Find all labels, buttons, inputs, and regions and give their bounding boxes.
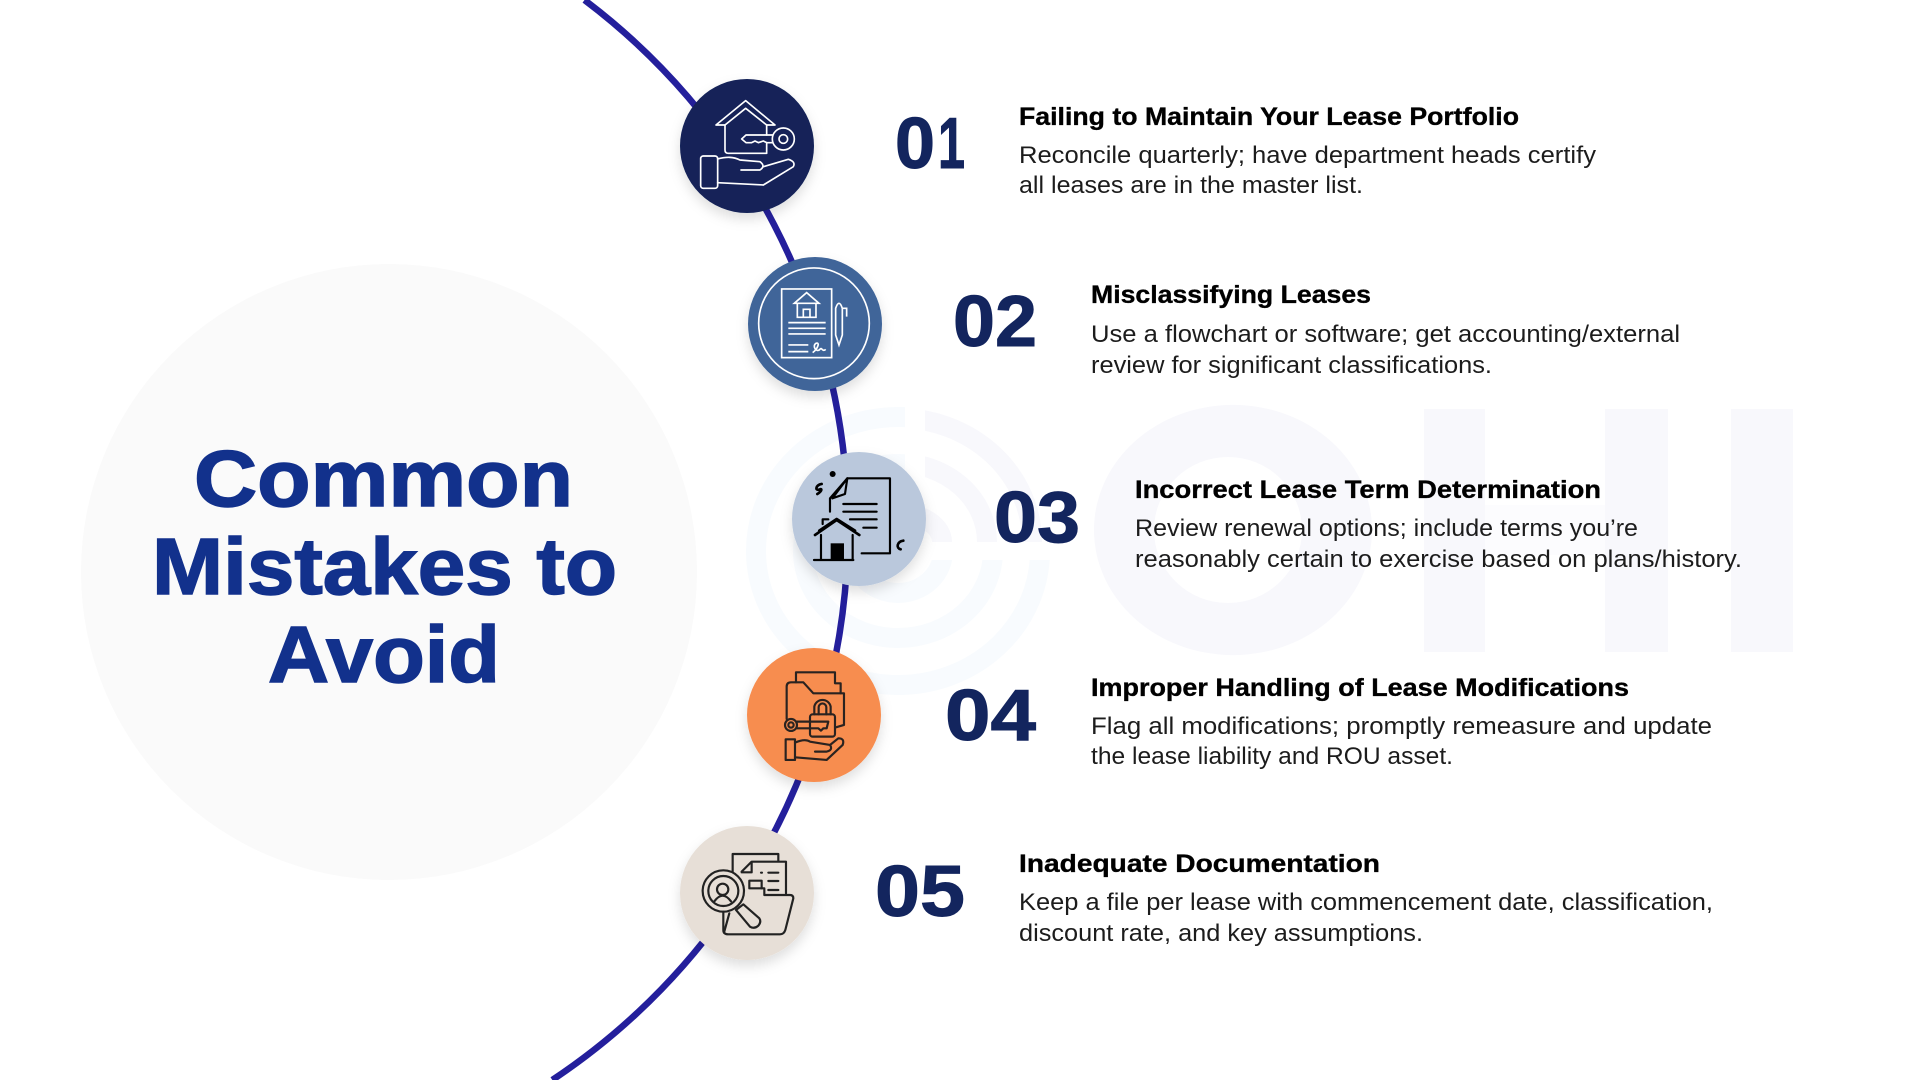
heading 04: Improper Handling of Lease Modifications <box>1091 674 1629 702</box>
number 03: 03 <box>994 478 1080 558</box>
text block 02: Use a flowchart or software; get accounting/external <box>1091 321 1680 348</box>
icon: folder lock key hand <box>747 648 881 782</box>
curved timeline arc <box>552 0 848 1080</box>
number 04: 04 <box>945 676 1036 756</box>
title: Mistakes to <box>152 522 617 611</box>
text block 04: Flag all modifications; promptly remeasure and update <box>1091 713 1712 740</box>
number 05: 05 <box>875 852 965 932</box>
panel: mistake 01 <box>680 79 1596 213</box>
text block 05: Keep a file per lease with commencement date, classification, <box>1019 889 1713 916</box>
panel: mistake 02 <box>748 257 1680 391</box>
title: Avoid <box>268 610 500 699</box>
icon: signed lease document <box>748 257 882 391</box>
title: Common <box>194 434 573 523</box>
text block 04: the lease liability and ROU asset. <box>1091 743 1453 770</box>
panel: mistake 05 <box>680 826 1713 960</box>
text block 03: Review renewal options; include terms you’re <box>1135 515 1638 542</box>
icon: house key in hand <box>680 79 814 213</box>
watermark logo <box>756 405 1793 685</box>
number 02: 02 <box>953 282 1037 362</box>
text block 04 <box>1091 713 1712 770</box>
text block 05: discount rate, and key assumptions. <box>1019 920 1423 947</box>
panel: mistake 04 <box>747 648 1712 782</box>
number 01: 1 <box>938 104 965 184</box>
title <box>152 434 617 699</box>
text block 03 <box>1135 515 1742 573</box>
icon: folder with magnifier <box>680 826 814 960</box>
text block 01: all leases are in the master list. <box>1019 172 1363 199</box>
number 01 <box>895 104 965 184</box>
text block 02 <box>1091 321 1680 379</box>
text block 01 <box>1019 142 1596 199</box>
text block 01: Reconcile quarterly; have department heads certify <box>1019 142 1596 169</box>
number 01: 0 <box>895 104 935 184</box>
heading 01: Failing to Maintain Your Lease Portfolio <box>1019 103 1519 131</box>
text block 03: reasonably certain to exercise based on plans/history. <box>1135 546 1742 573</box>
text block 02: review for significant classifications. <box>1091 352 1492 379</box>
heading 03: Incorrect Lease Term Determination <box>1135 476 1601 504</box>
heading 02: Misclassifying Leases <box>1091 281 1371 309</box>
text block 05 <box>1019 889 1713 947</box>
panel: mistake 03 <box>792 452 1742 586</box>
icon: house and document <box>792 452 926 586</box>
heading 05: Inadequate Documentation <box>1019 850 1380 878</box>
large background circle <box>81 264 697 880</box>
